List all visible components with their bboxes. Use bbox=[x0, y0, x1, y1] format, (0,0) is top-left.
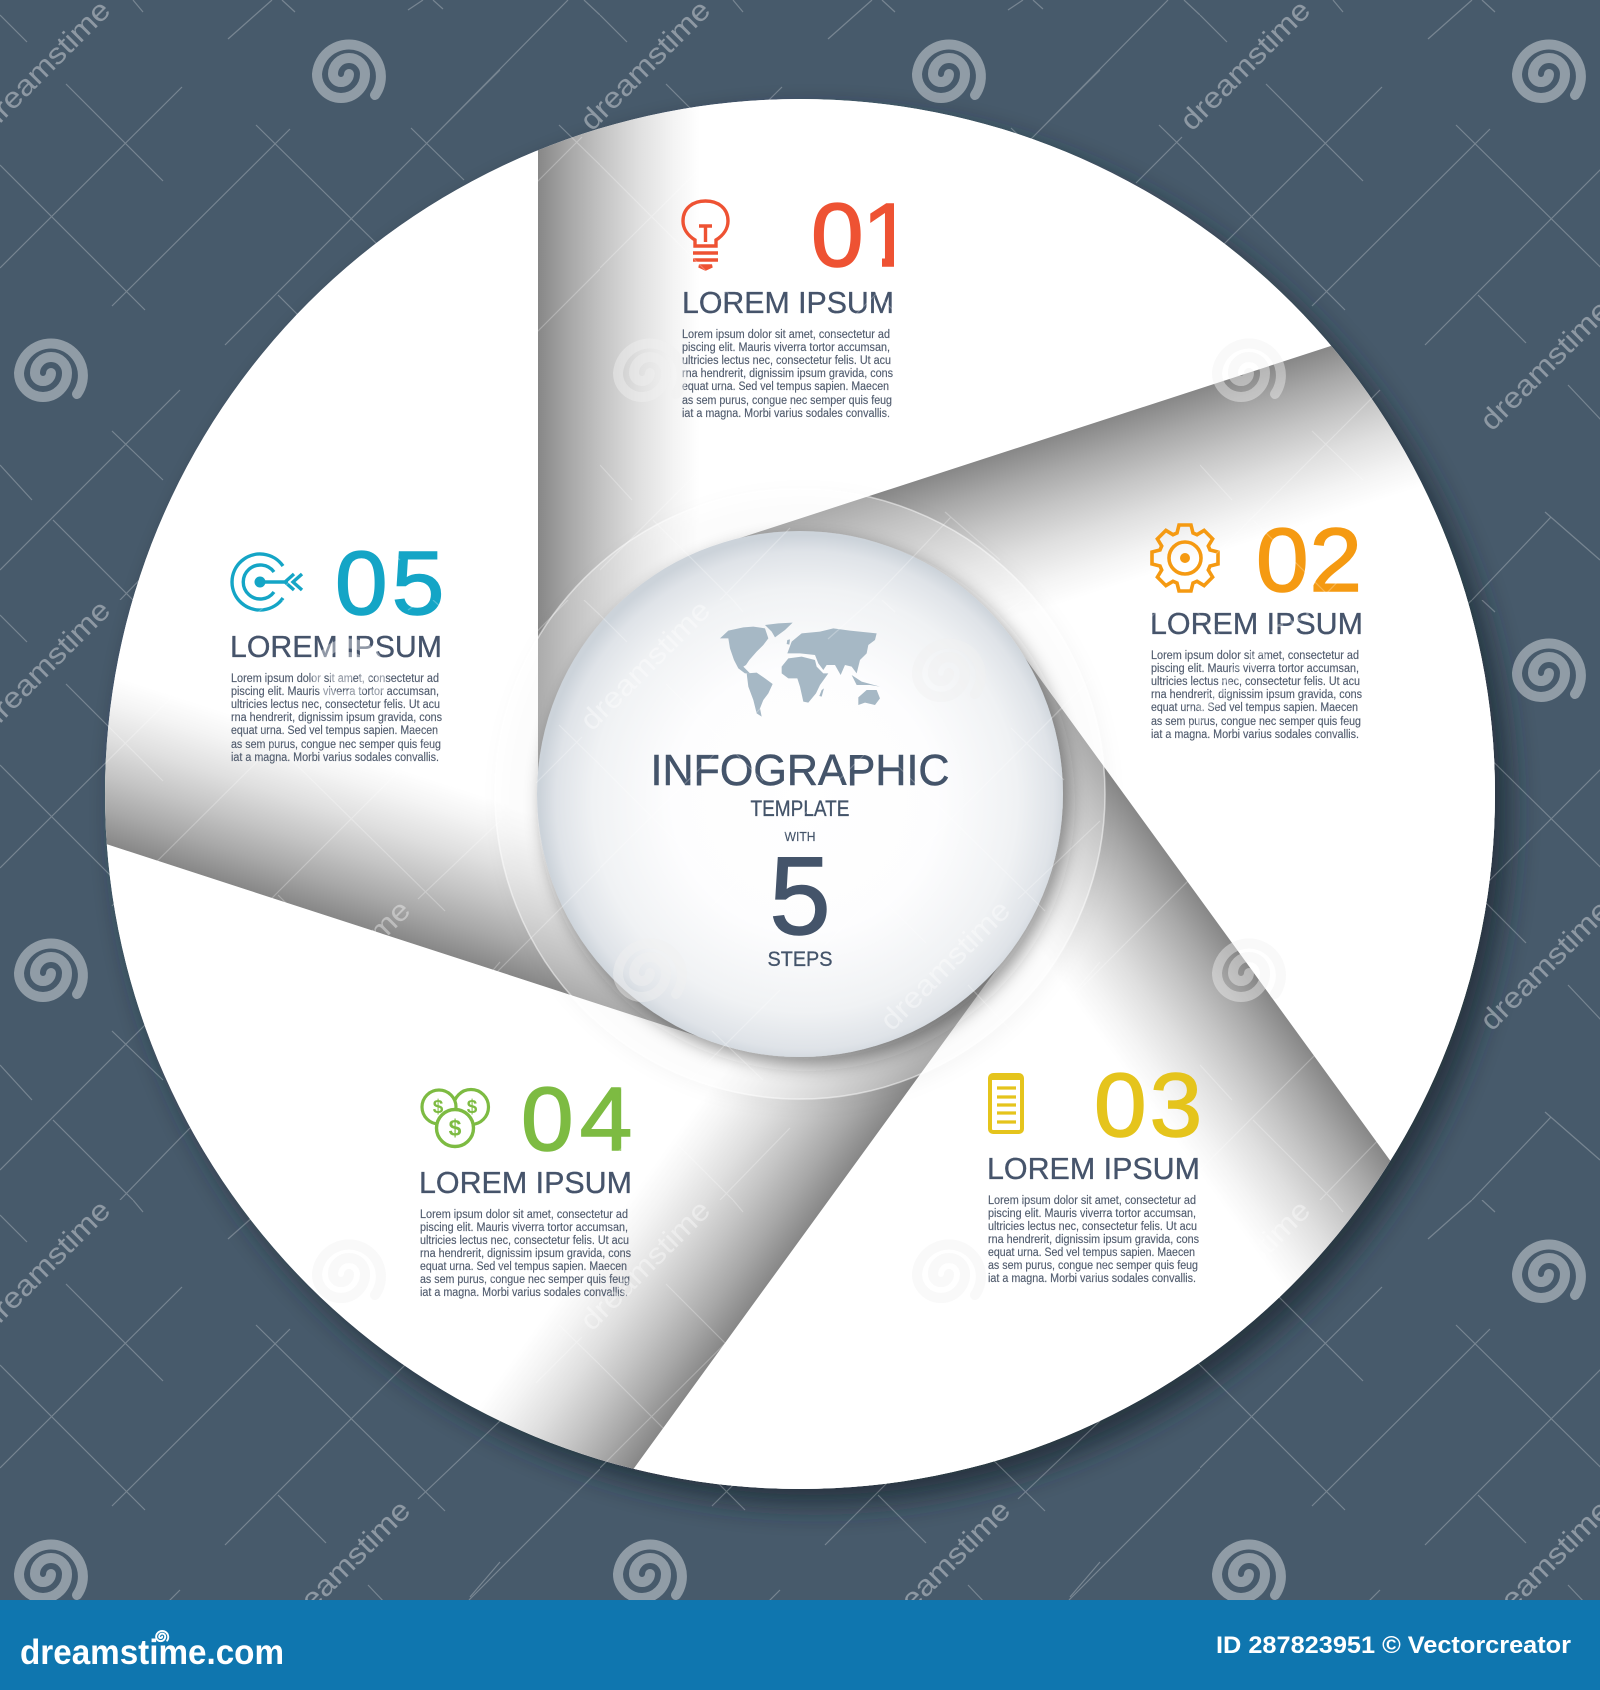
heading 04: LOREM IPSUM bbox=[419, 1165, 632, 1200]
step 04 bbox=[419, 1068, 632, 1299]
icon: clipboard bbox=[990, 1075, 1022, 1132]
number 01: 0 bbox=[811, 184, 864, 286]
text block 03: rna hendrerit, dignissim ipsum gravida, cons bbox=[988, 1234, 1199, 1246]
white outer disc bbox=[105, 99, 1495, 1489]
text block 04: ultricies lectus nec, consectetur felis. Ut acu bbox=[420, 1235, 629, 1247]
watermark text: dreamstime bbox=[1174, 0, 1317, 137]
watermark text: dreamstime bbox=[874, 1494, 1017, 1637]
text block 03: piscing elit. Mauris viverra tortor accumsan, bbox=[988, 1208, 1196, 1220]
text block 02 bbox=[1151, 650, 1362, 741]
heading 03: LOREM IPSUM bbox=[987, 1151, 1200, 1186]
text block 03: equat urna. Sed vel tempus sapien. Maecen bbox=[988, 1247, 1195, 1259]
footer band bbox=[0, 1600, 1600, 1690]
text block 05: ultricies lectus nec, consectetur felis. Ut acu bbox=[231, 699, 440, 711]
icon: light bulb bbox=[683, 201, 728, 269]
watermark text: dreamstime bbox=[274, 1494, 417, 1637]
watermark text: dreamstime bbox=[874, 294, 1017, 437]
icon: target with arrow bbox=[232, 554, 302, 610]
number 01 bbox=[814, 202, 894, 268]
step 05 bbox=[230, 532, 444, 764]
text block 01: Lorem ipsum dolor sit amet, consectetur ad bbox=[682, 329, 890, 341]
icon: coins: $ bbox=[467, 1097, 478, 1118]
text block 05: Lorem ipsum dolor sit amet, consectetur ad bbox=[231, 673, 439, 685]
blade 04 shading bbox=[106, 844, 999, 1468]
watermark spirals on white bbox=[638, 392, 639, 992]
text block 05: rna hendrerit, dignissim ipsum gravida, cons bbox=[231, 712, 442, 724]
label: WITH: WITH bbox=[784, 829, 816, 844]
watermark text: dreamstime bbox=[874, 894, 1017, 1037]
text block 01: ultricies lectus nec, consectetur felis. Ut acu bbox=[682, 355, 891, 367]
text block 04: equat urna. Sed vel tempus sapien. Maecen bbox=[420, 1261, 627, 1273]
watermark text: dreamstime bbox=[1174, 594, 1317, 737]
text block 02: ultricies lectus nec, consectetur felis. Ut acu bbox=[1151, 676, 1360, 688]
heading 05: LOREM IPSUM bbox=[230, 629, 442, 664]
text block 01: as sem purus, congue nec semper quis feug bbox=[682, 395, 892, 407]
icon: coins bbox=[422, 1090, 488, 1146]
watermark text: dreamstime bbox=[574, 1194, 717, 1337]
text block 01: rna hendrerit, dignissim ipsum gravida, cons bbox=[682, 368, 893, 380]
text block 01 bbox=[682, 329, 893, 420]
text block 02: iat a magna. Morbi varius sodales convallis. bbox=[1151, 729, 1359, 741]
number 02: 02 bbox=[1256, 509, 1362, 611]
heading: INFOGRAPHIC: INFOGRAPHIC bbox=[650, 746, 950, 795]
text block 03: ultricies lectus nec, consectetur felis. Ut acu bbox=[988, 1221, 1197, 1233]
text block 05: piscing elit. Mauris viverra tortor accumsan, bbox=[231, 686, 439, 698]
step 03 bbox=[987, 1054, 1202, 1285]
shutter blades bbox=[105, 99, 1495, 1489]
icon: coins: $ bbox=[433, 1097, 444, 1118]
text block 01: iat a magna. Morbi varius sodales convallis. bbox=[682, 408, 890, 420]
label: STEPS: STEPS bbox=[768, 948, 832, 971]
text block 04: piscing elit. Mauris viverra tortor accumsan, bbox=[420, 1222, 628, 1234]
text block 04 bbox=[420, 1209, 631, 1299]
text block 02: piscing elit. Mauris viverra tortor accumsan, bbox=[1151, 663, 1359, 675]
blade 01 shading bbox=[538, 99, 1331, 771]
centre title bbox=[650, 746, 950, 971]
watermark text: dreamstime bbox=[574, 0, 717, 137]
text block 05 bbox=[231, 673, 442, 764]
footer logo spiral bbox=[156, 1631, 168, 1641]
centre disc bbox=[537, 531, 1063, 1057]
watermark text: dreamstime bbox=[1174, 1194, 1317, 1337]
text block 04: as sem purus, congue nec semper quis feug bbox=[420, 1274, 630, 1286]
number: 5: 5 bbox=[769, 835, 831, 958]
step 02 bbox=[1150, 509, 1363, 741]
text block 02: Lorem ipsum dolor sit amet, consectetur ad bbox=[1151, 650, 1359, 662]
text block 04: Lorem ipsum dolor sit amet, consectetur ad bbox=[420, 1209, 628, 1221]
text block 01: piscing elit. Mauris viverra tortor accumsan, bbox=[682, 342, 890, 354]
text block 03: as sem purus, congue nec semper quis feug bbox=[988, 1260, 1198, 1272]
number 01: 1 bbox=[862, 184, 915, 286]
text block 02: equat urna. Sed vel tempus sapien. Maecen bbox=[1151, 702, 1358, 714]
text block 03: Lorem ipsum dolor sit amet, consectetur ad bbox=[988, 1195, 1196, 1207]
text block 02: rna hendrerit, dignissim ipsum gravida, cons bbox=[1151, 689, 1362, 701]
watermark text: dreamstime bbox=[274, 894, 417, 1037]
translucent ring around centre bbox=[495, 489, 1105, 1099]
text block 05: iat a magna. Morbi varius sodales convallis. bbox=[231, 752, 439, 764]
heading 02: LOREM IPSUM bbox=[1150, 606, 1363, 641]
icon: world map bbox=[720, 623, 880, 717]
footer credit: ID 287823951 © Vectorcreator bbox=[1216, 1632, 1571, 1659]
blade 03 shading bbox=[634, 656, 1390, 1489]
blade 02 shading bbox=[740, 346, 1495, 1160]
number 04: 04 bbox=[521, 1068, 632, 1170]
text block 04: iat a magna. Morbi varius sodales convallis. bbox=[420, 1287, 628, 1299]
subheading: TEMPLATE: TEMPLATE bbox=[750, 796, 850, 821]
footer logo text: dreamstime.com bbox=[20, 1633, 284, 1672]
text block 05: equat urna. Sed vel tempus sapien. Maecen bbox=[231, 725, 438, 737]
blade 05 shading bbox=[105, 150, 698, 1036]
text block 02: as sem purus, congue nec semper quis feug bbox=[1151, 716, 1361, 728]
icon: gear bbox=[1152, 525, 1218, 591]
text block 04: rna hendrerit, dignissim ipsum gravida, cons bbox=[420, 1248, 631, 1260]
step 01 bbox=[681, 199, 894, 420]
icon: coins: $ bbox=[449, 1115, 462, 1141]
watermark text: dreamstime bbox=[274, 294, 417, 437]
text block 01: equat urna. Sed vel tempus sapien. Maecen bbox=[682, 381, 889, 393]
text block 03: iat a magna. Morbi varius sodales convallis. bbox=[988, 1273, 1196, 1285]
watermark text: dreamstime bbox=[574, 594, 717, 737]
number 03: 03 bbox=[1094, 1054, 1202, 1156]
number 05: 05 bbox=[335, 532, 444, 634]
heading 01: LOREM IPSUM bbox=[682, 285, 894, 320]
text block 03 bbox=[988, 1195, 1199, 1285]
text block 05: as sem purus, congue nec semper quis feug bbox=[231, 739, 441, 751]
